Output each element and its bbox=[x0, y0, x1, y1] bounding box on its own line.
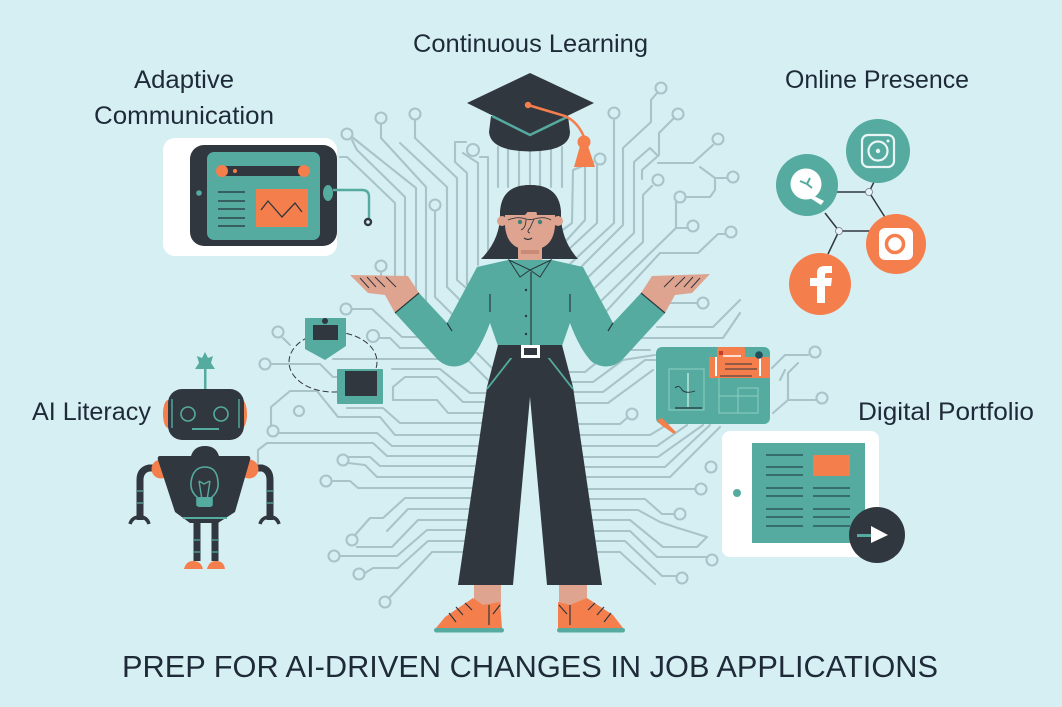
label: Adaptive Communication bbox=[94, 66, 274, 130]
belt buckle bbox=[498, 345, 562, 358]
facebook orange bbox=[789, 253, 851, 315]
icon: graduation cap bbox=[467, 73, 595, 167]
instagram orange bbox=[866, 214, 926, 274]
title: PREP FOR AI-DRIVEN CHANGES IN JOB APPLICATIONS bbox=[122, 649, 938, 684]
label: Adaptive Communication: Communication bbox=[94, 102, 274, 130]
icon: chat chip and processor chip with dashed orbit bbox=[289, 318, 383, 404]
trousers bbox=[458, 345, 602, 585]
label: Online Presence: Online Presence bbox=[785, 66, 969, 94]
legs bbox=[474, 583, 587, 607]
circuit board traces background bbox=[258, 93, 815, 597]
shoes bbox=[434, 598, 625, 632]
neck and face bbox=[497, 185, 563, 266]
label: Adaptive Communication: Adaptive bbox=[134, 66, 234, 94]
green shirt with sleeves bbox=[395, 260, 665, 367]
label: Digital Portfolio: Digital Portfolio bbox=[858, 398, 1034, 426]
hair back bbox=[481, 185, 578, 259]
label: Continuous Learning: Continuous Learning bbox=[413, 30, 648, 58]
icon: tablet with chart bbox=[163, 138, 371, 256]
label: AI Literacy: AI Literacy bbox=[32, 398, 151, 426]
icon: digital portfolio tablet bbox=[722, 431, 905, 563]
circuit board node rings bbox=[260, 82, 828, 608]
icon: social media network bbox=[776, 119, 926, 315]
person illustration bbox=[350, 185, 710, 632]
icon: design folder board bbox=[656, 347, 770, 434]
instagram teal bbox=[846, 119, 910, 183]
search bubble teal bbox=[776, 154, 838, 216]
icon: robot with lightbulb bbox=[130, 352, 279, 569]
hands bbox=[350, 274, 710, 313]
